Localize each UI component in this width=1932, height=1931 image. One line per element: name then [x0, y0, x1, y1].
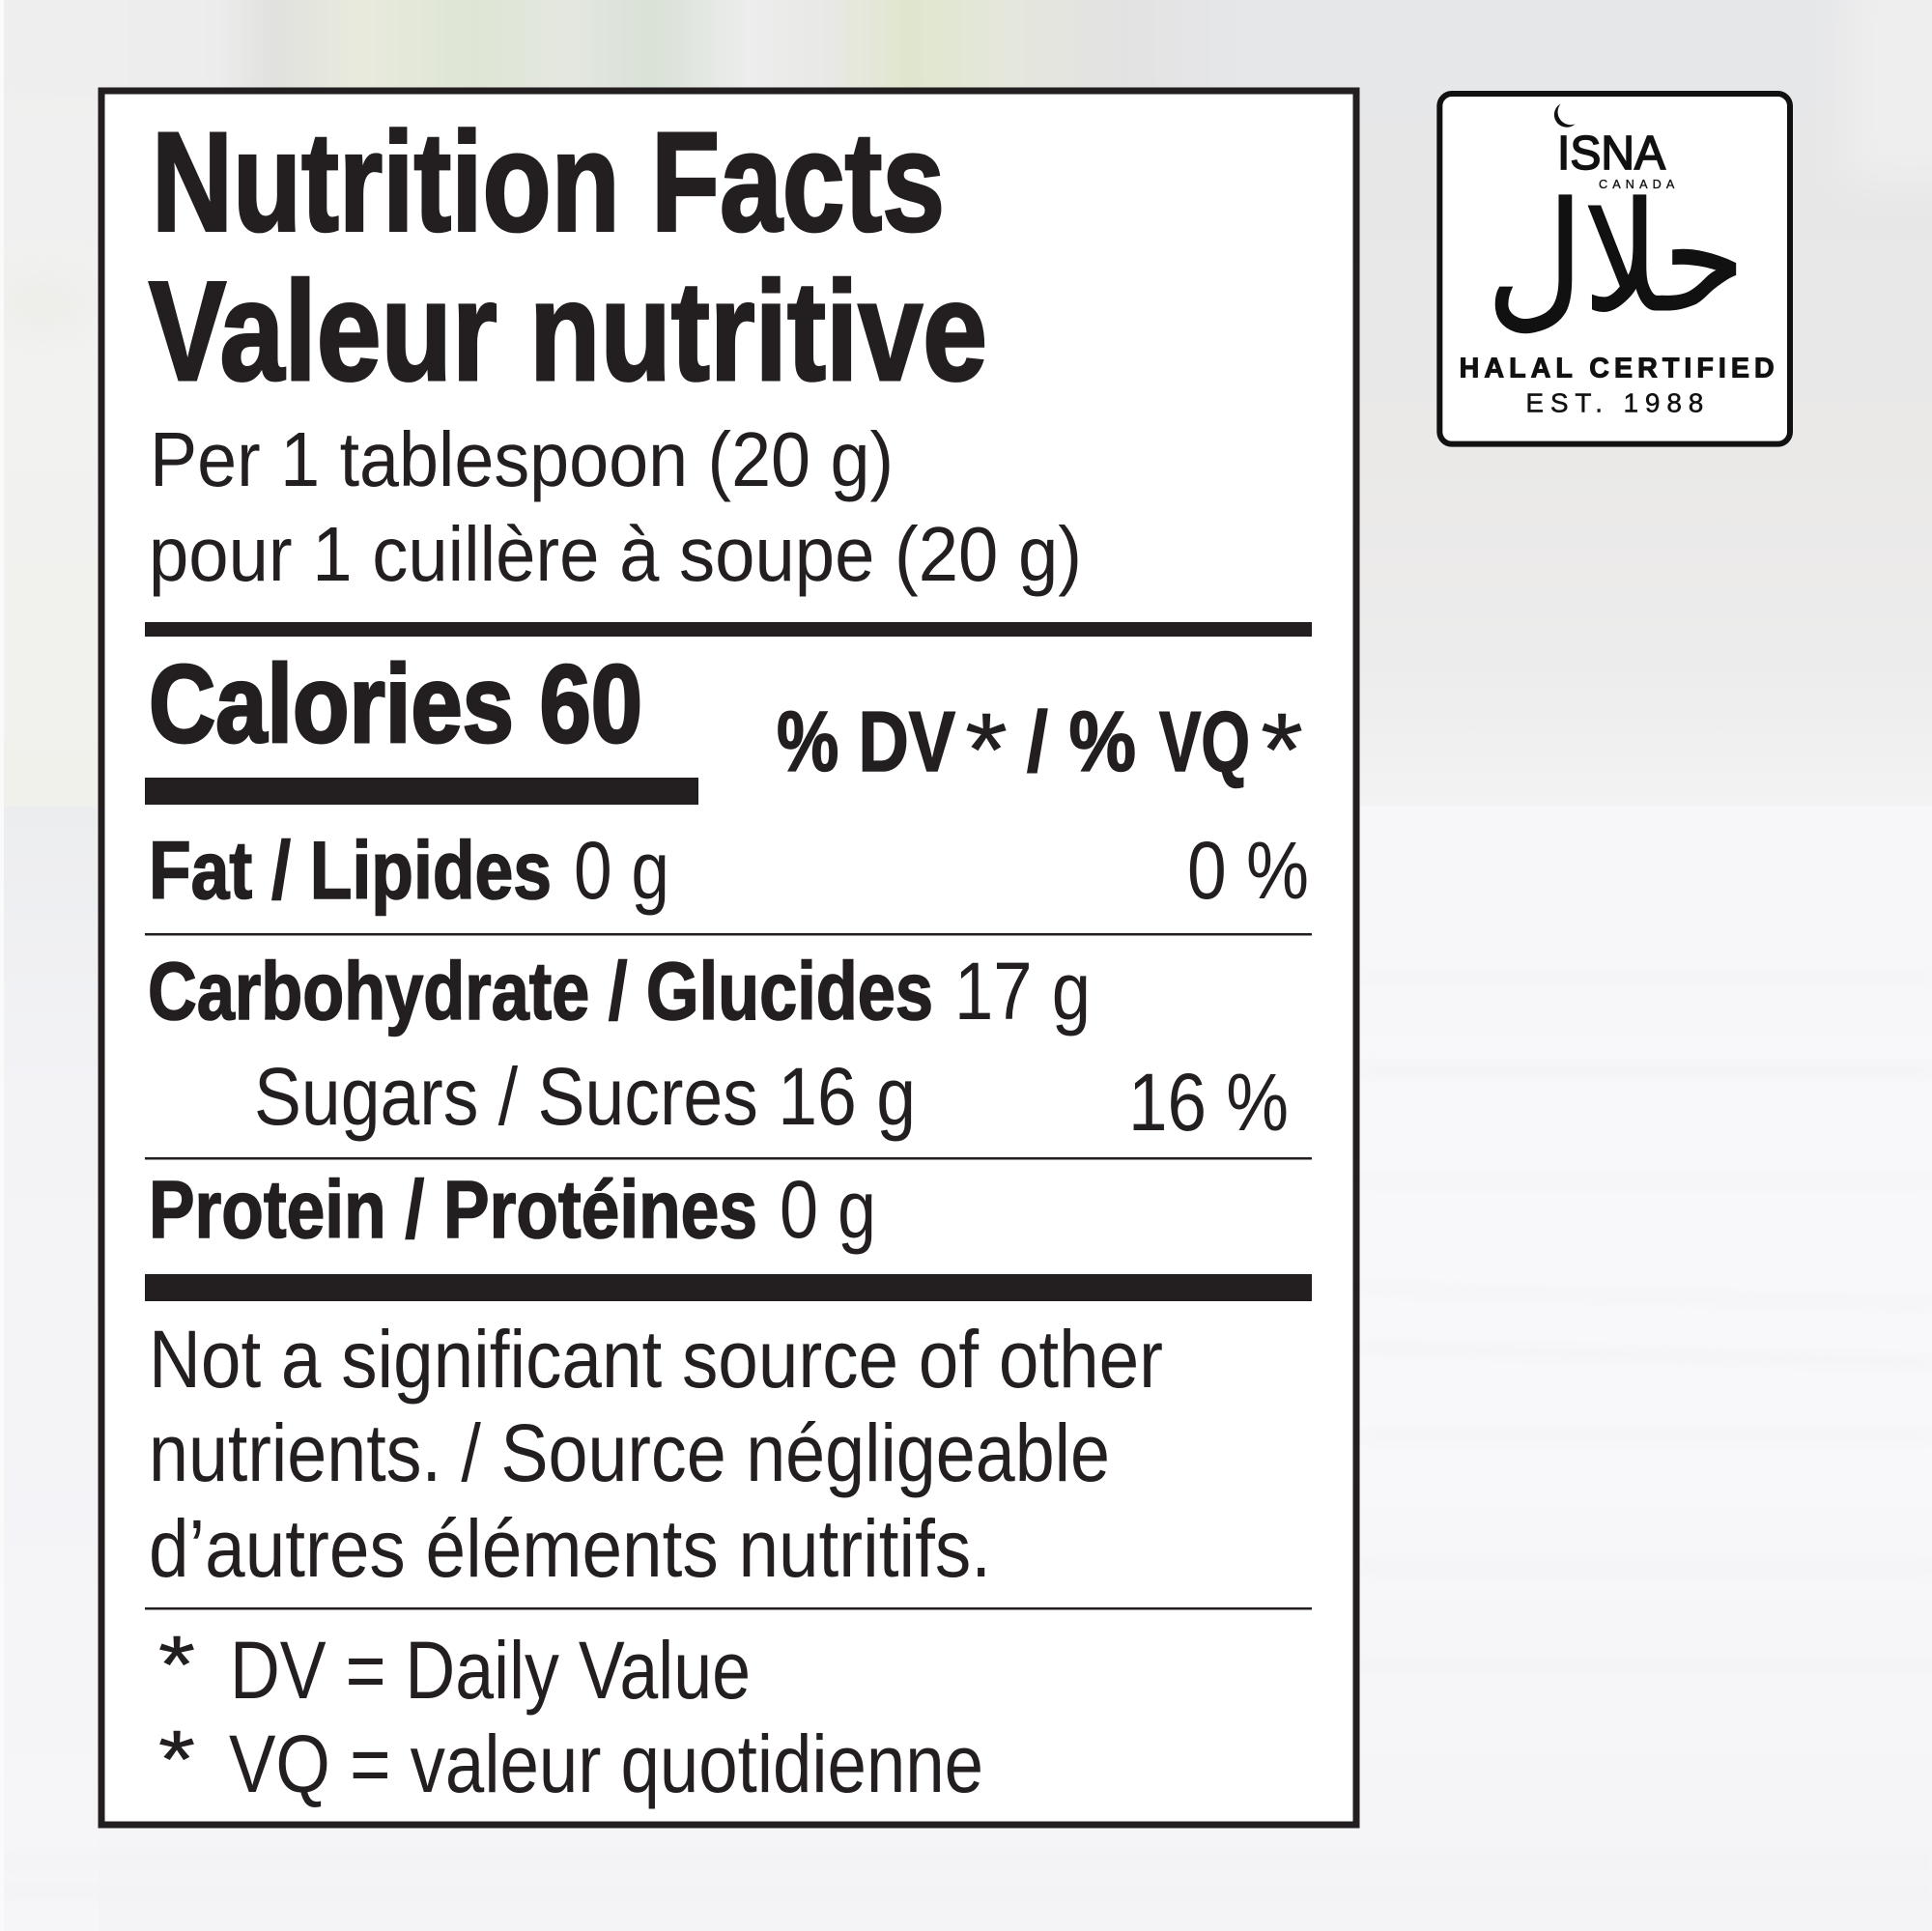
row: protein: 0 g [780, 1164, 876, 1255]
row: carbohydrate: 17 g [954, 946, 1091, 1036]
heading: Valeur nutritive: Valeur nutritive [149, 252, 987, 410]
note: not a significant source: Not a significant source of other [149, 1314, 1163, 1405]
note: not a significant source: d’autres éléments nutritifs. [149, 1503, 991, 1594]
serving size french: pour 1 cuillère à soupe (20 g) [149, 511, 1082, 597]
daily value header [777, 691, 1303, 808]
icon: crescent [1554, 103, 1576, 128]
thick bar under calories [145, 778, 698, 805]
logo word: CANADA: CANADA [1599, 178, 1675, 191]
row: fat: 0 g [574, 825, 669, 916]
note: not a significant source: nutrients. / Source négligeable [149, 1407, 1110, 1498]
thick rule under serving size [145, 622, 1312, 637]
badge: ISNA Canada halal certified [1439, 94, 1790, 444]
row: sugars: 16 % [1128, 1057, 1289, 1148]
footnote: valeur quotidienne: * [158, 1714, 195, 1804]
daily value header: % DV [777, 694, 955, 789]
note: not a significant source [149, 1314, 1163, 1594]
text: EST. 1988: EST. 1988 [1525, 388, 1703, 418]
daily value header: / % [1027, 694, 1136, 789]
arabic word: halal: حلال [1487, 170, 1746, 346]
row: sugars: Sugars / Sucres 16 g [254, 1051, 916, 1142]
logo word: ISNA: ISNA [1557, 127, 1665, 180]
row: fat: Fat / Lipides [149, 825, 552, 916]
row: carbohydrate: Carbohydrate / Glucides [148, 946, 933, 1036]
footnote: daily value: DV = Daily Value [230, 1625, 751, 1716]
row: fat: 0 % [1187, 825, 1309, 916]
text: HALAL CERTIFIED: HALAL CERTIFIED [1460, 354, 1775, 384]
panel: nutrition facts table [101, 91, 1356, 1825]
heading: Nutrition Facts: Nutrition Facts [152, 102, 945, 261]
row: fat [149, 825, 1309, 916]
row: protein: Protein / Protéines [149, 1164, 757, 1255]
row: sugars [254, 1051, 1289, 1148]
footnote: valeur quotidienne: VQ = valeur quotidienne [229, 1718, 983, 1809]
daily value header: * [1261, 691, 1303, 808]
calories: Calories 60 [149, 643, 642, 766]
daily value header: * [965, 691, 1008, 808]
footnote: daily value: * [158, 1619, 195, 1710]
serving size english: Per 1 tablespoon (20 g) [150, 416, 894, 502]
thick bar under protein [145, 1274, 1312, 1301]
daily value header: VQ [1159, 694, 1250, 789]
